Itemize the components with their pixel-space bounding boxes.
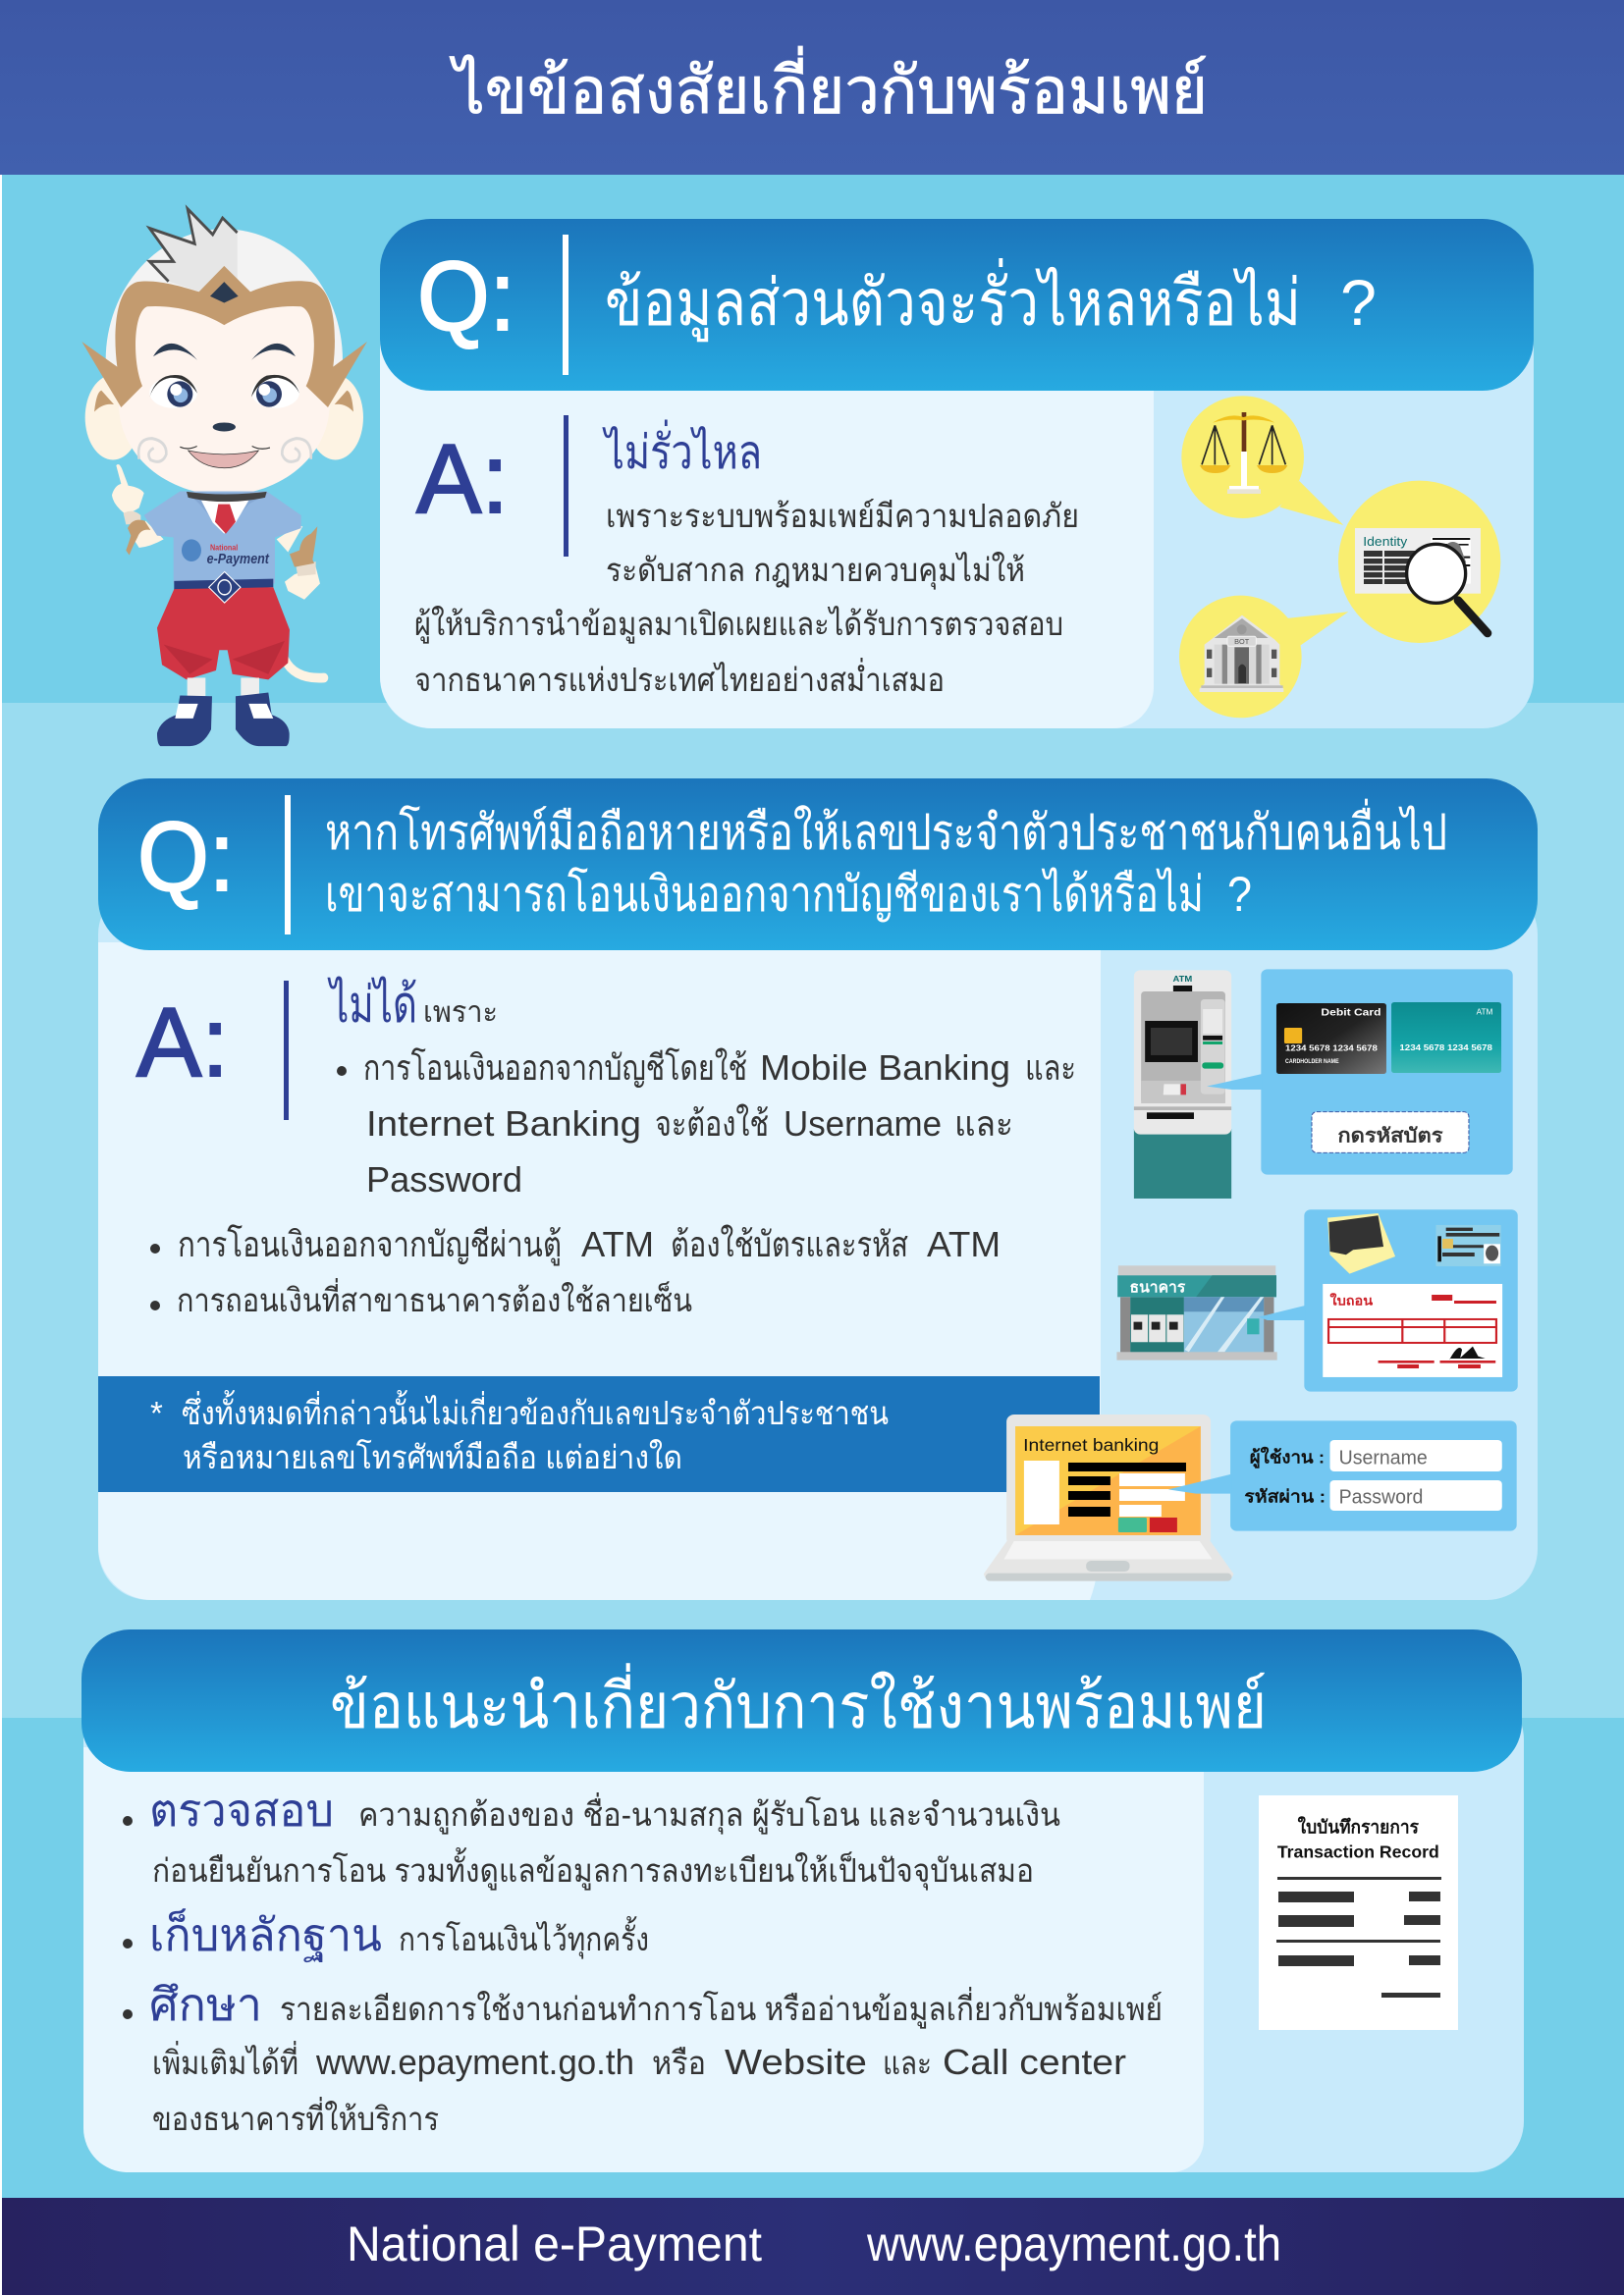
note strip bbox=[98, 1376, 1100, 1492]
bank branch bbox=[1116, 1265, 1277, 1361]
answer 2 text: ATM bbox=[927, 1224, 1001, 1264]
answer 1 text: ไม่รั่วไหล bbox=[602, 419, 762, 479]
nose and mouth bbox=[213, 422, 236, 431]
footer band bbox=[2, 2198, 1624, 2295]
answer 2 text: A: bbox=[136, 988, 229, 1097]
card callout: 1234 5678 1234 5678 bbox=[1399, 1042, 1492, 1052]
answer 2 text: และ bbox=[1025, 1047, 1076, 1088]
advice text: ตรวจสอบ bbox=[149, 1785, 334, 1836]
note strip: * bbox=[150, 1395, 163, 1431]
mascot: e-Payment bbox=[207, 551, 269, 566]
card callout: Debit Card bbox=[1321, 1008, 1381, 1018]
advice text: การโอนเงินไว้ทุกครั้ง bbox=[399, 1916, 649, 1959]
shoes bbox=[157, 693, 290, 746]
answer 1 background bbox=[380, 294, 1534, 728]
advice text: Call center bbox=[943, 2042, 1126, 2082]
answer 2 text: ไม่ได้ bbox=[327, 976, 417, 1034]
helmet and spikes bbox=[106, 229, 343, 491]
eyebrows bbox=[153, 344, 296, 360]
withdrawal callout bbox=[1259, 1209, 1518, 1392]
question 2 header: เขาจะสามารถโอนเงินออกจากบัญชีของเราได้หรือไม่ bbox=[325, 867, 1204, 922]
login callout: Password bbox=[1339, 1486, 1423, 1508]
answer 2 text: การโอนเงินออกจากบัญชีผ่านตู้ bbox=[178, 1224, 562, 1266]
belt bbox=[174, 579, 273, 591]
answer 2 text: ต้องใช้บัตรและรหัส bbox=[671, 1224, 908, 1264]
laptop bbox=[984, 1415, 1233, 1581]
advice text: รายละเอียดการใช้งานก่อนทำการโอน หรืออ่านข้อมูลเกี่ยวกับพร้อมเพย์ bbox=[280, 1987, 1163, 2029]
advice text: ก่อนยืนยันการโอน รวมทั้งดูแลข้อมูลการลงทะเบียนให้เป็นปัจจุบันเสมอ bbox=[152, 1847, 1034, 1891]
card callout: CARDHOLDER NAME bbox=[1285, 1058, 1339, 1065]
face bbox=[119, 314, 330, 495]
answer 2 text: จะต้องใช้ bbox=[655, 1103, 769, 1144]
note strip: ซึ่งทั้งหมดที่กล่าวนั้นไม่เกี่ยวข้องกับเลขประจำตัวประชาชน bbox=[182, 1390, 889, 1431]
panel: question 2 bbox=[98, 778, 1538, 1600]
card callout bbox=[1207, 969, 1513, 1175]
laptop: Internet banking bbox=[1023, 1436, 1159, 1455]
shirt bbox=[144, 491, 301, 584]
card callout: ATM bbox=[1477, 1007, 1492, 1017]
ID card bbox=[1435, 1225, 1501, 1266]
answer 2 text: Internet Banking bbox=[366, 1103, 641, 1144]
question 1 header: ข้อมูลส่วนตัวจะรั่วไหลหรือไม่ bbox=[605, 258, 1301, 343]
advice text: เก็บหลักฐาน bbox=[149, 1908, 382, 1962]
icon: scales bbox=[1200, 412, 1287, 494]
answer 1 text bbox=[414, 415, 1079, 698]
icon: central bank building: BOT bbox=[1234, 637, 1250, 646]
ATM card bbox=[1391, 1002, 1501, 1073]
login callout: รหัสผ่าน : bbox=[1244, 1486, 1326, 1506]
login callout: ผู้ใช้งาน : bbox=[1250, 1446, 1325, 1468]
icon: internet banking laptop with login callout bbox=[984, 1415, 1517, 1581]
answer 1 text: จากธนาคารแห่งประเทศไทยอย่างสม่ำเสมอ bbox=[414, 658, 945, 698]
mascot bbox=[81, 209, 367, 746]
answer 2 text: ATM bbox=[581, 1224, 654, 1264]
header band with title bbox=[0, 0, 1624, 175]
login callout: Username bbox=[1339, 1447, 1428, 1468]
advice heading: ข้อแนะนำเกี่ยวกับการใช้งานพร้อมเพย์ bbox=[330, 1663, 1267, 1741]
tail bbox=[285, 660, 324, 678]
answer 2 text: และ bbox=[954, 1103, 1013, 1144]
ears bbox=[85, 375, 140, 459]
ATM machine: ATM bbox=[1172, 974, 1192, 984]
note strip: หรือหมายเลขโทรศัพท์มือถือ แต่อย่างใด bbox=[183, 1439, 682, 1475]
footer band: www.epayment.go.th bbox=[866, 2216, 1281, 2271]
advice text: และ bbox=[883, 2045, 932, 2081]
header band with title: ไขข้อสงสัยเกี่ยวกับพร้อมเพย์ bbox=[449, 46, 1208, 127]
shorts bbox=[157, 587, 290, 679]
icon: central bank building bbox=[1200, 615, 1283, 692]
icon: transaction record receipt bbox=[1259, 1795, 1458, 2030]
socks bbox=[188, 677, 205, 696]
answer 1 text: A: bbox=[416, 424, 509, 534]
answer 2 text: เพราะ bbox=[423, 996, 498, 1029]
answer 2 text: Password bbox=[366, 1159, 522, 1200]
icon: identity card and magnifier: Identity bbox=[1363, 534, 1408, 549]
answer 2 background bbox=[98, 883, 1538, 1600]
advice text: ศึกษา bbox=[149, 1979, 262, 2030]
question 2 header bbox=[98, 778, 1538, 950]
card callout: กดรหัสบัตร bbox=[1337, 1125, 1443, 1147]
shirt logo: National bbox=[210, 543, 238, 552]
answer 1 text: ระดับสากล กฎหมายควบคุมไม่ให้ bbox=[606, 552, 1025, 590]
bank book bbox=[1327, 1213, 1395, 1274]
advice text: หรือ bbox=[652, 2045, 706, 2081]
debit card bbox=[1276, 1003, 1386, 1074]
question 1 header bbox=[380, 219, 1534, 391]
arms and hands bbox=[133, 521, 302, 553]
login callout bbox=[1168, 1420, 1517, 1531]
advice text: ของธนาคารที่ให้บริการ bbox=[152, 2097, 439, 2137]
answer 2 text: Username bbox=[784, 1103, 942, 1144]
withdrawal callout: ใบถอน bbox=[1330, 1292, 1374, 1308]
answer 2 text: การถอนเงินที่สาขาธนาคารต้องใช้ลายเซ็น bbox=[177, 1278, 692, 1318]
advice heading bbox=[81, 1629, 1522, 1772]
advice text: เพิ่มเติมได้ที่ bbox=[152, 2041, 298, 2081]
icon: identity card and magnifier bbox=[1355, 528, 1488, 633]
advice text: Website bbox=[725, 2042, 867, 2082]
icon: law, central bank and identity check bbox=[1179, 396, 1500, 718]
ATM machine bbox=[1134, 970, 1231, 1199]
answer 2 text bbox=[136, 976, 1076, 1318]
PIN button bbox=[1312, 1112, 1469, 1152]
question 1 header: ? bbox=[1340, 266, 1377, 339]
icon: transaction record receipt: ใบบันทึกรายการ bbox=[1298, 1815, 1419, 1837]
question 2 header: Q: bbox=[137, 802, 235, 912]
icon: transaction record receipt: Transaction Record bbox=[1277, 1842, 1439, 1862]
answer 2 text: การโอนเงินออกจากบัญชีโดยใช้ bbox=[363, 1047, 747, 1088]
advice text bbox=[123, 1785, 1163, 2137]
icon: ATM with card callout bbox=[1134, 969, 1513, 1199]
answer 2 text: Mobile Banking bbox=[760, 1047, 1010, 1088]
question 1 header: Q: bbox=[417, 241, 515, 351]
eyes bbox=[149, 377, 197, 408]
brown hair bbox=[81, 266, 367, 407]
answer 1 text: ผู้ให้บริการนำข้อมูลมาเปิดเผยและได้รับการตรวจสอบ bbox=[414, 606, 1063, 644]
advice text: ความถูกต้องของ ชื่อ-นามสกุล ผู้รับโอน และจำนวนเงิน bbox=[358, 1792, 1060, 1835]
card callout: 1234 5678 1234 5678 bbox=[1285, 1043, 1378, 1052]
footer band: National e-Payment bbox=[347, 2216, 762, 2271]
advice background bbox=[83, 1688, 1524, 2172]
bank branch: ธนาคาร bbox=[1130, 1278, 1185, 1296]
cheek swirls bbox=[138, 439, 166, 461]
buckle bbox=[209, 571, 241, 603]
withdrawal slip bbox=[1323, 1284, 1502, 1377]
icon: bank branch with withdrawal callout bbox=[1116, 1209, 1518, 1392]
answer 1 text: เพราะระบบพร้อมเพย์มีความปลอดภัย bbox=[606, 498, 1079, 534]
panel: advice bbox=[81, 1629, 1524, 2172]
panel: question 1 bbox=[380, 219, 1534, 728]
question 2 header: ? bbox=[1227, 867, 1252, 922]
advice text: www.epayment.go.th bbox=[315, 2042, 634, 2082]
